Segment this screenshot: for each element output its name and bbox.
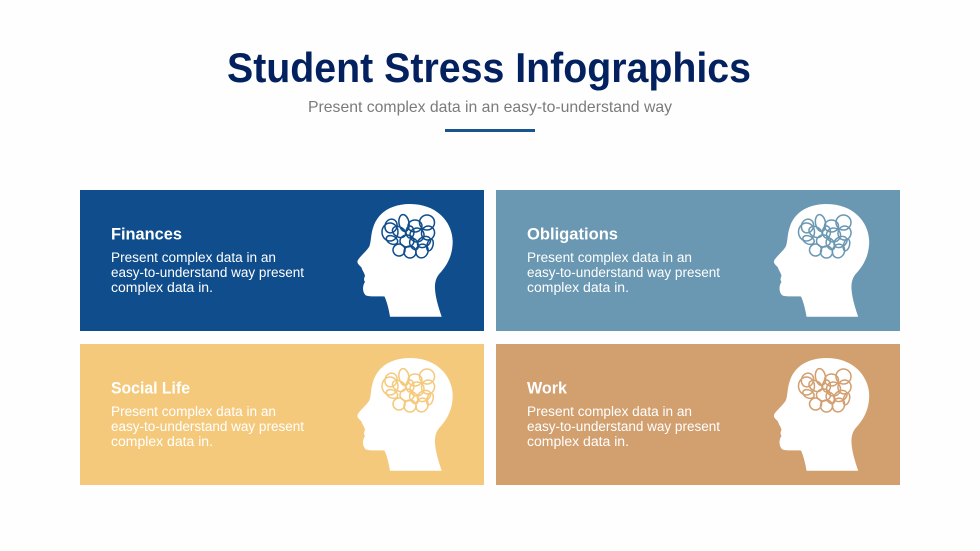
- text block: social life: complex data in.: [111, 434, 213, 449]
- text block: work: easy-to-understand way present: [527, 419, 720, 434]
- text block: social life: Present complex data in an: [111, 404, 276, 419]
- text block: obligations: Present complex data in an: [527, 250, 692, 265]
- text block: finances: easy-to-understand way present: [111, 265, 304, 280]
- title underline: [445, 129, 535, 132]
- text block: obligations: [527, 250, 720, 295]
- text block: finances: complex data in.: [111, 280, 213, 295]
- heading: finances: Finances: [111, 224, 182, 244]
- text block: obligations: complex data in.: [527, 280, 629, 295]
- icon: head with tangled thoughts: [774, 358, 869, 471]
- text block: obligations: easy-to-understand way present: [527, 265, 720, 280]
- heading: social life: Social Life: [111, 378, 190, 398]
- panel: social life: [80, 344, 484, 485]
- heading: work: Work: [527, 378, 568, 398]
- text block: social life: [111, 404, 304, 449]
- text block: work: [527, 404, 720, 449]
- heading: obligations: Obligations: [527, 224, 618, 244]
- text block: finances: [111, 250, 304, 295]
- icon: head with tangled thoughts: [357, 358, 453, 471]
- icon: head with tangled thoughts: [357, 204, 453, 317]
- text block: finances: Present complex data in an: [111, 250, 276, 265]
- title: Student Stress Infographics: [227, 44, 751, 91]
- panel: finances: [80, 190, 484, 331]
- icon: head with tangled thoughts: [774, 204, 869, 317]
- subtitle: Present complex data in an easy-to-understand way: [308, 99, 672, 116]
- panel: obligations: [496, 190, 900, 331]
- text block: work: complex data in.: [527, 434, 629, 449]
- text block: social life: easy-to-understand way present: [111, 419, 304, 434]
- panel: work: [496, 344, 900, 485]
- text block: work: Present complex data in an: [527, 404, 692, 419]
